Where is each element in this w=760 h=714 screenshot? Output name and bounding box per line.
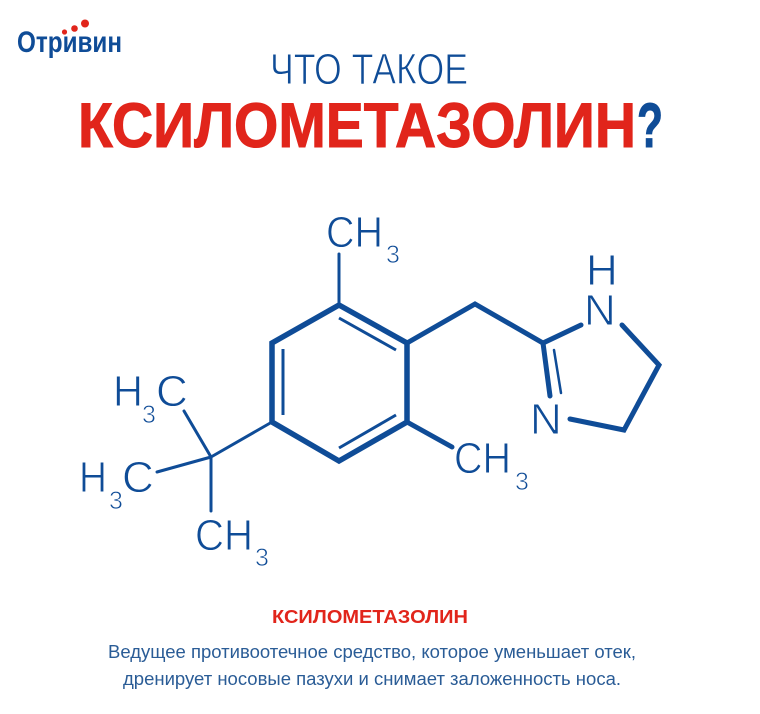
label: right CH3: 3: [515, 468, 529, 496]
description text: [108, 642, 636, 689]
title: line two: КСИЛОМЕТАЗОЛИН: [78, 91, 636, 161]
title: line two: ?: [637, 91, 663, 161]
chemical structure: xylometazoline: [79, 208, 659, 572]
label: right CH3: [454, 434, 529, 496]
logo: Otrivin: Отривин: [17, 26, 122, 59]
bonds: [157, 254, 659, 511]
description text: Ведущее противоотечное средство, которое уменьшает отек,: [108, 642, 636, 662]
label: upper H3C: H: [113, 367, 143, 416]
logo: Otrivin: [17, 20, 122, 59]
subheading: КСИЛОМЕТАЗОЛИН: [272, 606, 468, 627]
label: bottom CH3: [195, 511, 269, 572]
label: bottom CH3: 3: [255, 544, 269, 572]
description text: дренирует носовые пазухи и снимает заложенность носа.: [123, 669, 621, 689]
label: NH hydrogen: H: [586, 246, 618, 295]
label: top CH3: 3: [386, 241, 400, 269]
label: middle H3C: H: [79, 453, 107, 502]
label: NH nitrogen: N: [584, 286, 616, 335]
label: middle H3C: C: [122, 453, 154, 502]
title: line one: ЧТО ТАКОЕ: [270, 45, 468, 94]
label: middle H3C: 3: [109, 487, 123, 515]
label: middle H3C: [79, 453, 154, 515]
benzene ring: [272, 305, 407, 461]
label: right CH3: CH: [454, 434, 511, 483]
label: upper H3C: [113, 367, 188, 429]
label: lower nitrogen: N: [530, 395, 562, 444]
label: top CH3: CH: [326, 208, 383, 257]
label: top CH3: [326, 208, 400, 269]
label: upper H3C: 3: [142, 401, 156, 429]
label: upper H3C: C: [156, 367, 188, 416]
label: bottom CH3: CH: [195, 511, 253, 560]
